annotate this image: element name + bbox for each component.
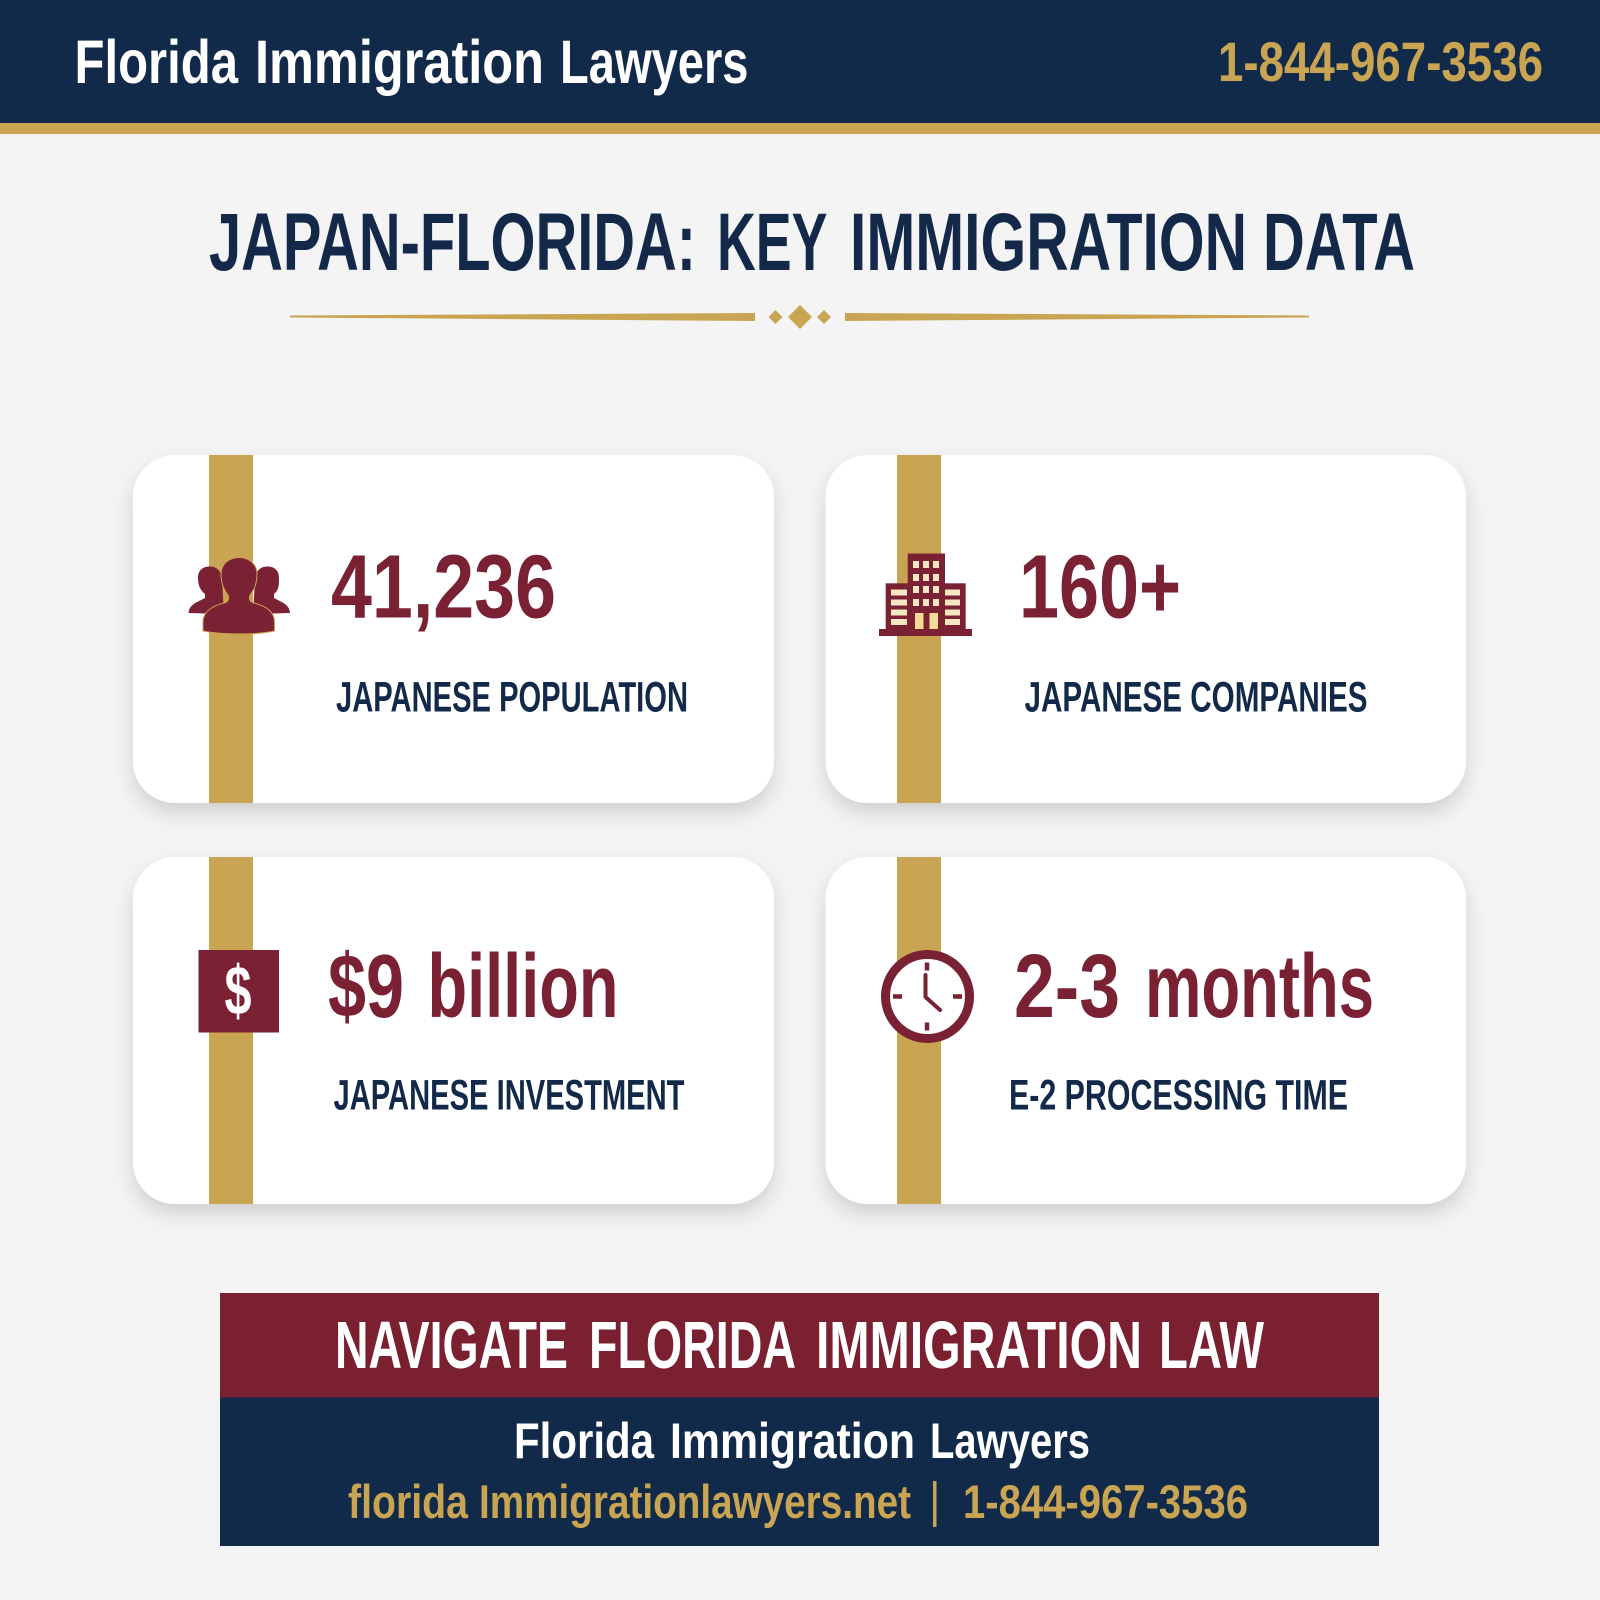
value: $9 billion: $9 xyxy=(328,937,404,1037)
banner separator xyxy=(933,1481,936,1527)
banner website xyxy=(348,1475,911,1528)
label: E-2 processing time: E-2 PROCESSING TIME xyxy=(1009,1072,1348,1120)
banner headline: NAVIGATE xyxy=(335,1308,568,1383)
banner headline: FLORIDA xyxy=(589,1308,796,1383)
header firm name: Immigration xyxy=(255,28,544,96)
main title: DATA xyxy=(1263,197,1415,288)
label: Japanese population: JAPANESE POPULATION xyxy=(336,674,688,722)
icon: people xyxy=(189,558,290,634)
label: Japanese investment: JAPANESE INVESTMENT xyxy=(334,1072,684,1120)
panel: Japanese population xyxy=(133,455,774,803)
panel: Japanese companies xyxy=(826,455,1466,803)
title divider with diamonds xyxy=(290,305,1309,329)
header firm name xyxy=(74,28,748,96)
call to action banner xyxy=(220,1293,1379,1546)
banner firm name: Florida xyxy=(514,1413,655,1469)
main title: JAPAN-FLORIDA: xyxy=(209,197,696,288)
icon: dollar square: $ xyxy=(224,952,252,1030)
header bar xyxy=(0,0,1600,134)
main title: IMMIGRATION xyxy=(850,197,1247,288)
main title: KEY xyxy=(717,197,828,288)
banner firm name: Immigration xyxy=(670,1413,915,1469)
label: Japanese companies: JAPANESE COMPANIES xyxy=(1024,674,1368,722)
header firm name: Lawyers xyxy=(560,28,748,96)
panel: E-2 processing time xyxy=(826,857,1466,1204)
icon: clock xyxy=(886,954,970,1038)
header firm name: Florida xyxy=(74,28,239,96)
value: 41,236: 41,236 xyxy=(331,538,556,638)
value: $9 billion xyxy=(328,937,618,1037)
value: 160+: 160+ xyxy=(1019,538,1181,638)
value: 2-3 months: months xyxy=(1145,937,1374,1037)
banner headline xyxy=(335,1308,1265,1383)
banner website: florida xyxy=(348,1475,469,1528)
icon: dollar square xyxy=(198,950,279,1032)
value: $9 billion: billion xyxy=(428,937,618,1037)
banner website: Immigrationlawyers.net xyxy=(479,1475,911,1528)
main title xyxy=(209,197,1415,288)
banner firm name: Lawyers xyxy=(930,1413,1090,1469)
banner firm name xyxy=(514,1413,1090,1469)
value: 2-3 months: 2-3 xyxy=(1014,937,1120,1037)
banner headline: LAW xyxy=(1159,1308,1265,1383)
banner phone number: 1-844-967-3536 xyxy=(963,1475,1248,1528)
icon: office building xyxy=(879,554,972,636)
banner headline: IMMIGRATION xyxy=(816,1308,1142,1383)
panel: Japanese investment xyxy=(133,857,774,1204)
value: 2-3 months xyxy=(1014,937,1374,1037)
